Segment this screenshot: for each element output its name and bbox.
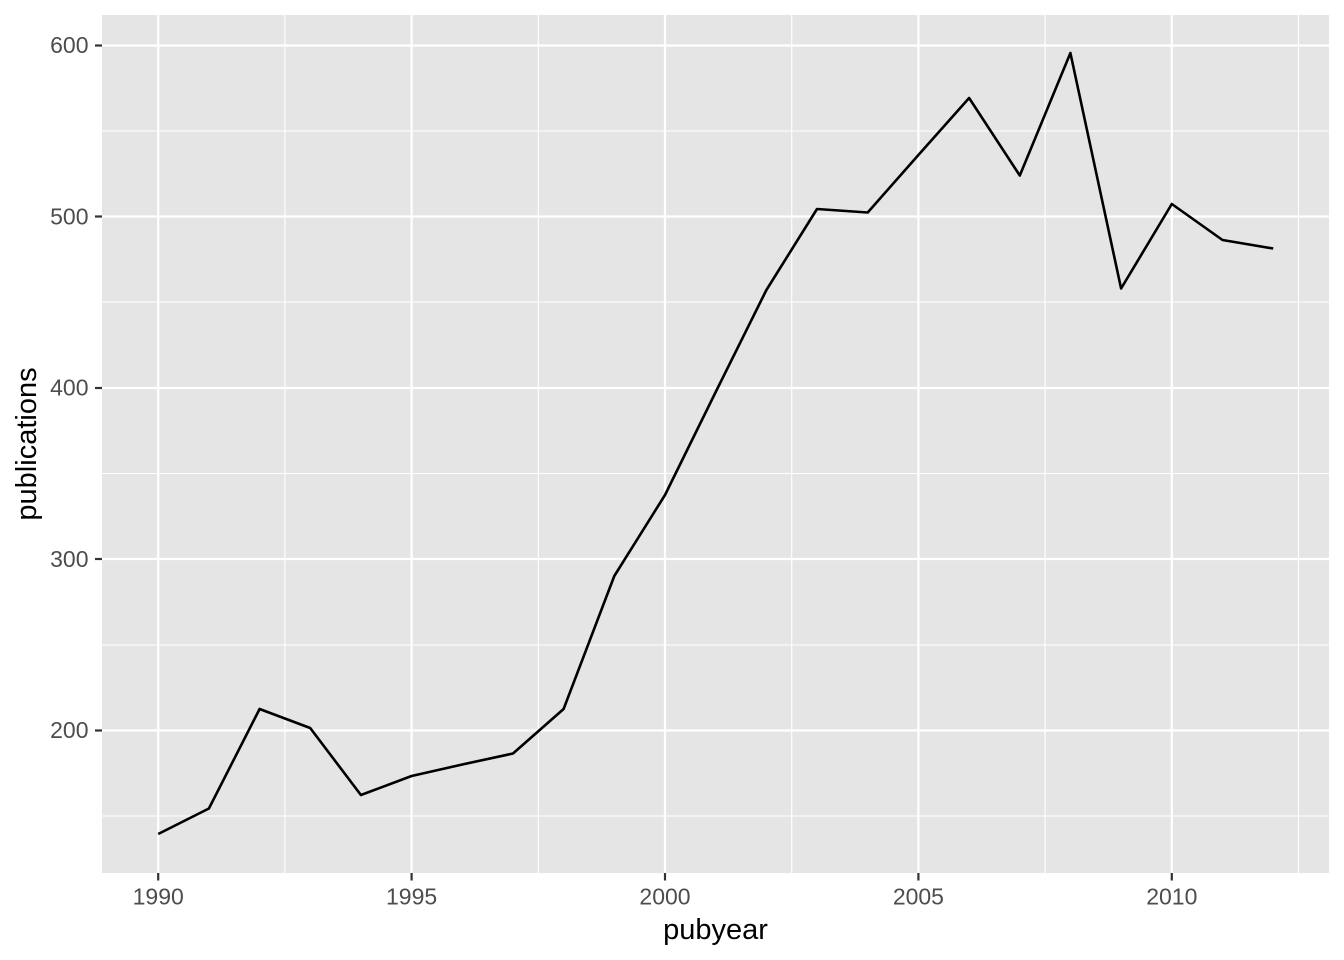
x axis ticks [158,873,1172,880]
x axis title: pubyear [663,914,768,946]
data line [158,53,1273,834]
y axis title: publications [11,367,43,521]
x axis labels: 2010 [1146,884,1197,910]
y axis ticks [95,46,102,730]
y axis labels: 500 [50,203,88,229]
x axis labels: 2005 [893,884,944,910]
x axis labels: 1995 [386,884,437,910]
x axis labels [133,884,1197,910]
x axis labels: 2000 [639,884,691,910]
y axis labels [50,32,88,743]
y axis labels: 200 [50,717,88,743]
y axis labels: 300 [50,546,88,572]
x axis labels: 1990 [133,884,184,910]
y axis labels: 400 [50,375,88,401]
y axis labels: 600 [50,32,88,58]
